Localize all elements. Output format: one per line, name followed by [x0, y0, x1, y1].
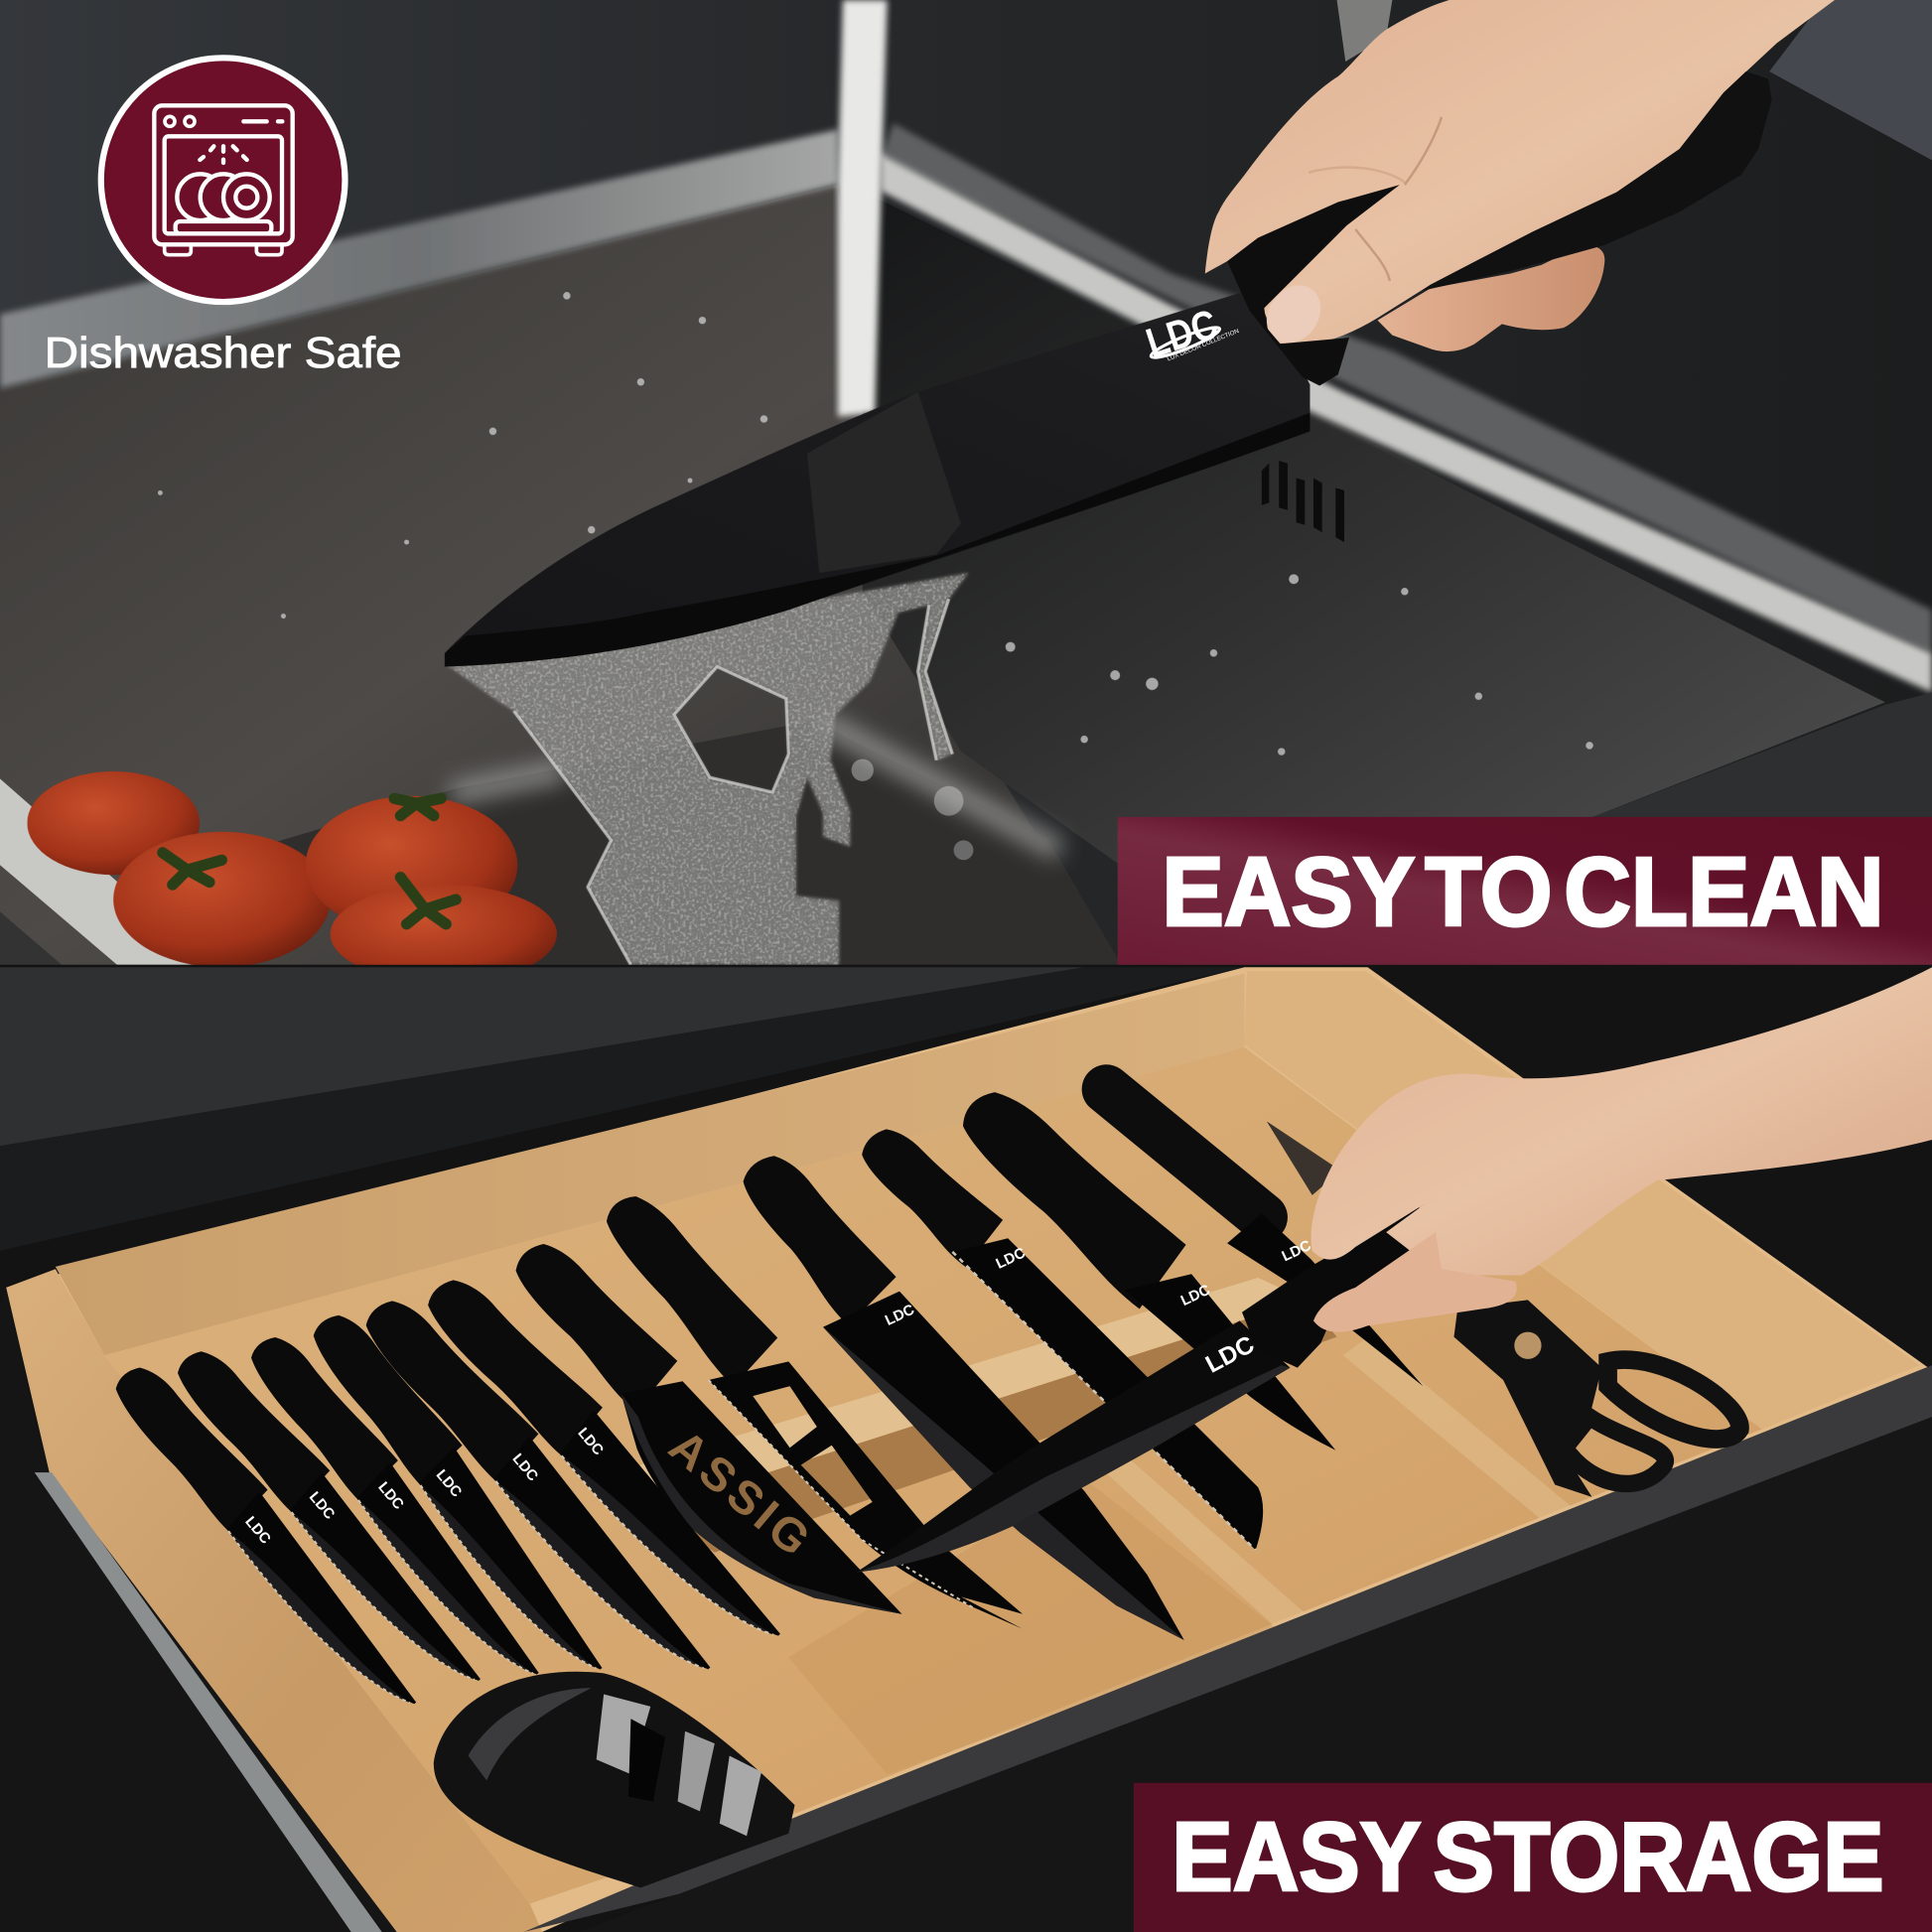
- knife 6: [413, 1265, 803, 1658]
- LDC logo: LDC: [1141, 300, 1223, 366]
- front rim left: [0, 778, 211, 965]
- knife 5: [350, 1286, 735, 1691]
- small blade logos: LDC: [883, 1302, 917, 1329]
- knife 9 chef: [730, 1141, 1184, 1640]
- sink floor: [277, 721, 1121, 965]
- icon: dishwasher safe badge: [101, 58, 345, 302]
- knife sharpener: [434, 1672, 794, 1887]
- knife 3: [237, 1324, 561, 1693]
- chef knife sharpened edge: [445, 413, 1310, 666]
- water stream: [838, 0, 888, 416]
- banner: easy storage: EASY STORAGE: [1172, 1802, 1884, 1911]
- held knife handle: [1242, 1205, 1440, 1368]
- drawer floor: [104, 1047, 1762, 1903]
- counter top: [0, 967, 1084, 1146]
- water splash specks: [446, 573, 968, 965]
- faucet: [1337, 0, 1392, 62]
- photo: knives in wooden drawer: [0, 965, 1932, 1932]
- knife 4: [299, 1302, 625, 1688]
- banner: easy storage: [1134, 1783, 1932, 1932]
- small blade logos: LDC: [994, 1245, 1029, 1273]
- knife 7 with letter cut-outs: [503, 1228, 901, 1614]
- hand holding chef knife: [1205, 0, 1835, 353]
- sink rim right bright: [881, 154, 1932, 692]
- held knife blade: [857, 1320, 1290, 1573]
- photo: knife washed in sink: [0, 0, 1932, 983]
- LDC logo on held knife: LDC: [1201, 1331, 1259, 1379]
- small blade logos: LDC: [374, 1479, 406, 1513]
- sink floor light bands: [451, 721, 1059, 850]
- counter top right lighter wall: [1769, 0, 1932, 160]
- hand and arm reaching into drawer: [1311, 967, 1932, 1276]
- small blade logos: [241, 1238, 1314, 1548]
- knife 11: [947, 1072, 1335, 1450]
- drawer front face: [579, 1417, 1932, 1932]
- icon: dishwasher: [154, 105, 293, 255]
- drawer left outer: [0, 1288, 397, 1932]
- raised divider: [617, 1278, 1337, 1553]
- LDC logo: LUX DECOR COLLECTION: [1167, 328, 1240, 362]
- drawer back wall: [56, 973, 1244, 1355]
- chef knife blade: [445, 286, 1310, 666]
- knife 12: [1106, 1089, 1423, 1386]
- small blade logos: LDC: [241, 1514, 273, 1548]
- knife 2: [164, 1338, 502, 1700]
- label: dishwasher safe: Dishwasher Safe: [45, 330, 402, 377]
- held knife edge: [857, 1365, 1290, 1573]
- floor shading: [788, 1478, 1282, 1774]
- banner: easy to clean: [1118, 817, 1932, 965]
- small blade logos: LDC: [574, 1426, 606, 1458]
- sink rim left: [0, 129, 838, 388]
- small blade logos: LDC: [433, 1467, 465, 1501]
- chef knife handle near guard: [1227, 185, 1400, 385]
- knife 1: [102, 1354, 438, 1723]
- drawer right wall: [1244, 971, 1920, 1430]
- knife 8 cheese: [593, 1180, 1023, 1629]
- lengthwise slats: [1078, 1337, 1589, 1632]
- small blade logos: LDC: [1178, 1282, 1213, 1310]
- drawer front lip: [0, 967, 1244, 1251]
- wet patch on blade: [807, 392, 961, 573]
- water droplets: [158, 292, 1593, 860]
- wooden drawer frame: [6, 967, 1928, 1932]
- thumb nail: [1256, 275, 1331, 353]
- drain slots: [1262, 461, 1344, 542]
- chef knife handle end: [1422, 71, 1772, 291]
- sink back left wall: [0, 185, 1116, 965]
- small blade logos: LDC: [306, 1489, 338, 1523]
- finger under handle: [1313, 1232, 1517, 1332]
- slide rail: [35, 1472, 382, 1932]
- tomatoes: [27, 771, 557, 983]
- knife 10 bread: [851, 1115, 1263, 1550]
- front counter right: [1589, 692, 1932, 818]
- drawer left wall: [6, 1269, 542, 1932]
- small blade logos: LDC: [509, 1451, 541, 1485]
- front counter left: [0, 911, 62, 965]
- water splash base: [446, 573, 968, 965]
- knife 7 with letter cut-outs: ASSIG: [660, 1419, 824, 1569]
- small blade logos: LDC: [1280, 1238, 1314, 1265]
- banner: easy to clean: EASY TO CLEAN: [1162, 837, 1884, 946]
- scissors: [1453, 1300, 1740, 1497]
- sink back right wall: [863, 191, 1885, 863]
- hand creases: [1309, 117, 1442, 281]
- splash outline: [514, 599, 952, 965]
- sink rim right outer: [881, 123, 1932, 653]
- drawer front top lip: [523, 1365, 1932, 1932]
